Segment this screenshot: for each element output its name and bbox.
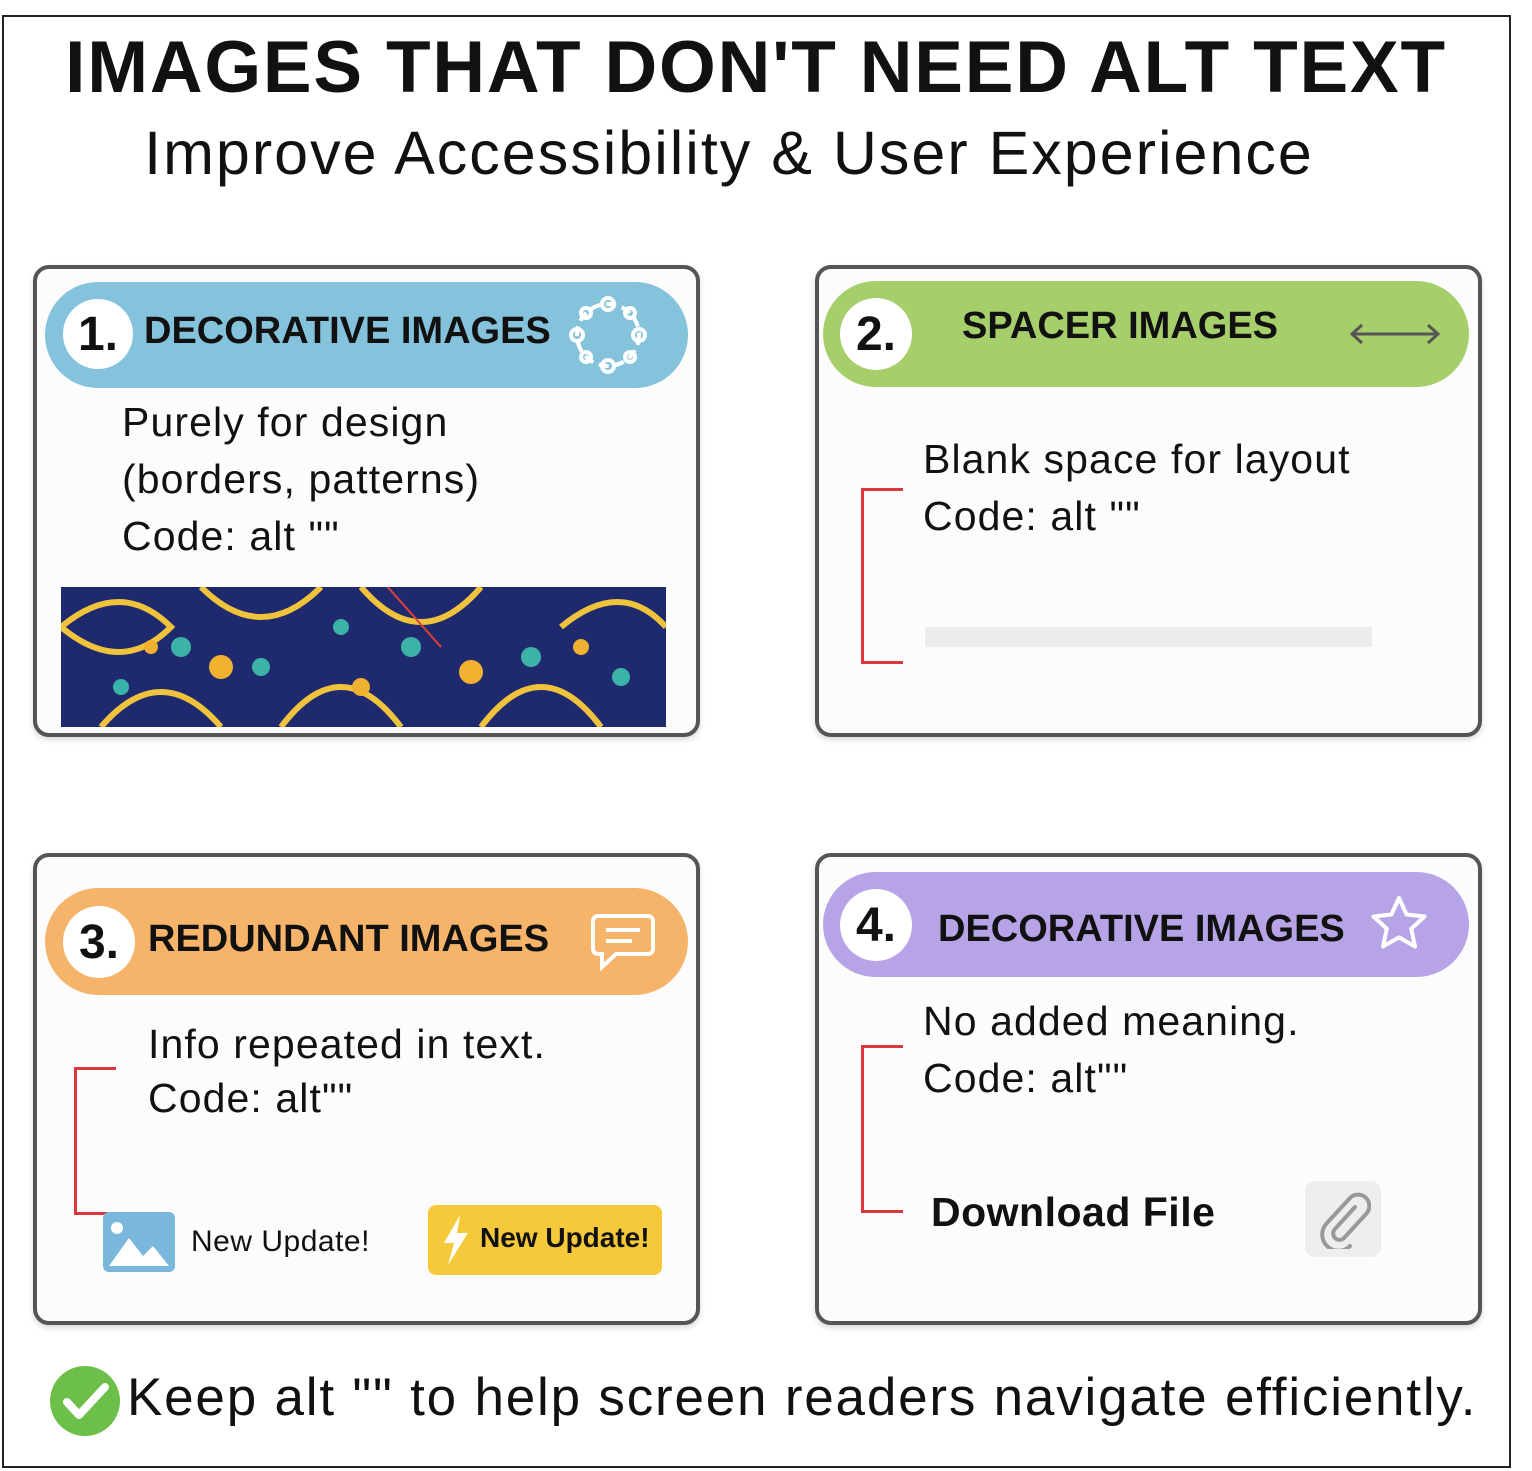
icon: paperclip [1305, 1181, 1381, 1257]
text 3: Code: alt"" [148, 1075, 353, 1121]
icon: chat bubble [591, 914, 655, 971]
pattern image [61, 587, 666, 727]
text 4 [923, 998, 1300, 1101]
panel: redundant images [33, 853, 700, 1325]
number 1: 1. [78, 308, 118, 361]
label plain: New Update! [191, 1225, 370, 1258]
text 1: Purely for design [122, 399, 448, 445]
panel: spacer images [815, 265, 1482, 737]
number 2: 2. [856, 308, 896, 361]
text 3: Info repeated in text. [148, 1021, 546, 1067]
heading 1: DECORATIVE IMAGES [144, 310, 551, 352]
text 1: (borders, patterns) [122, 456, 480, 502]
spacer bar [925, 627, 1372, 647]
text 1: Code: alt "" [122, 513, 340, 559]
text 4: No added meaning. [923, 998, 1300, 1044]
subtitle: Improve Accessibility & User Experience [144, 119, 1314, 187]
icon: image [103, 1212, 175, 1272]
header pill 2 [823, 281, 1469, 387]
heading 4: DECORATIVE IMAGES [938, 908, 1345, 950]
icon: star [1371, 896, 1427, 949]
yellow badge [428, 1205, 662, 1275]
number 4 [840, 889, 912, 961]
text 3 [148, 1021, 546, 1121]
bracket 3 [74, 1067, 116, 1215]
text 2 [923, 436, 1351, 539]
icon: double arrow [1350, 324, 1440, 344]
header pill 3 [45, 888, 688, 995]
heading 2: SPACER IMAGES [962, 305, 1278, 347]
text 2: Blank space for layout [923, 436, 1351, 482]
bracket 2 [861, 488, 903, 664]
header pill 4 [823, 872, 1469, 977]
text 1 [122, 399, 480, 559]
text 2: Code: alt "" [923, 493, 1141, 539]
panel: decorative images 4 [815, 853, 1482, 1325]
number 3: 3. [79, 916, 119, 969]
yellow badge: New Update! [480, 1222, 650, 1253]
download label: Download File [931, 1189, 1215, 1235]
number 3 [63, 906, 135, 978]
panel: decorative images [33, 265, 700, 737]
number 2 [840, 298, 912, 370]
number 4: 4. [856, 899, 896, 952]
header pill 1 [45, 282, 688, 388]
footer text: Keep alt "" to help screen readers navigate efficiently. [127, 1368, 1477, 1427]
number 1 [63, 299, 133, 369]
bracket 4 [861, 1045, 903, 1213]
text 4: Code: alt"" [923, 1055, 1128, 1101]
icon: check [50, 1366, 120, 1436]
title: IMAGES THAT DON'T NEED ALT TEXT [65, 27, 1447, 108]
heading 3: REDUNDANT IMAGES [148, 918, 549, 960]
footer note [50, 1366, 1477, 1436]
icon: ornament [569, 296, 647, 374]
